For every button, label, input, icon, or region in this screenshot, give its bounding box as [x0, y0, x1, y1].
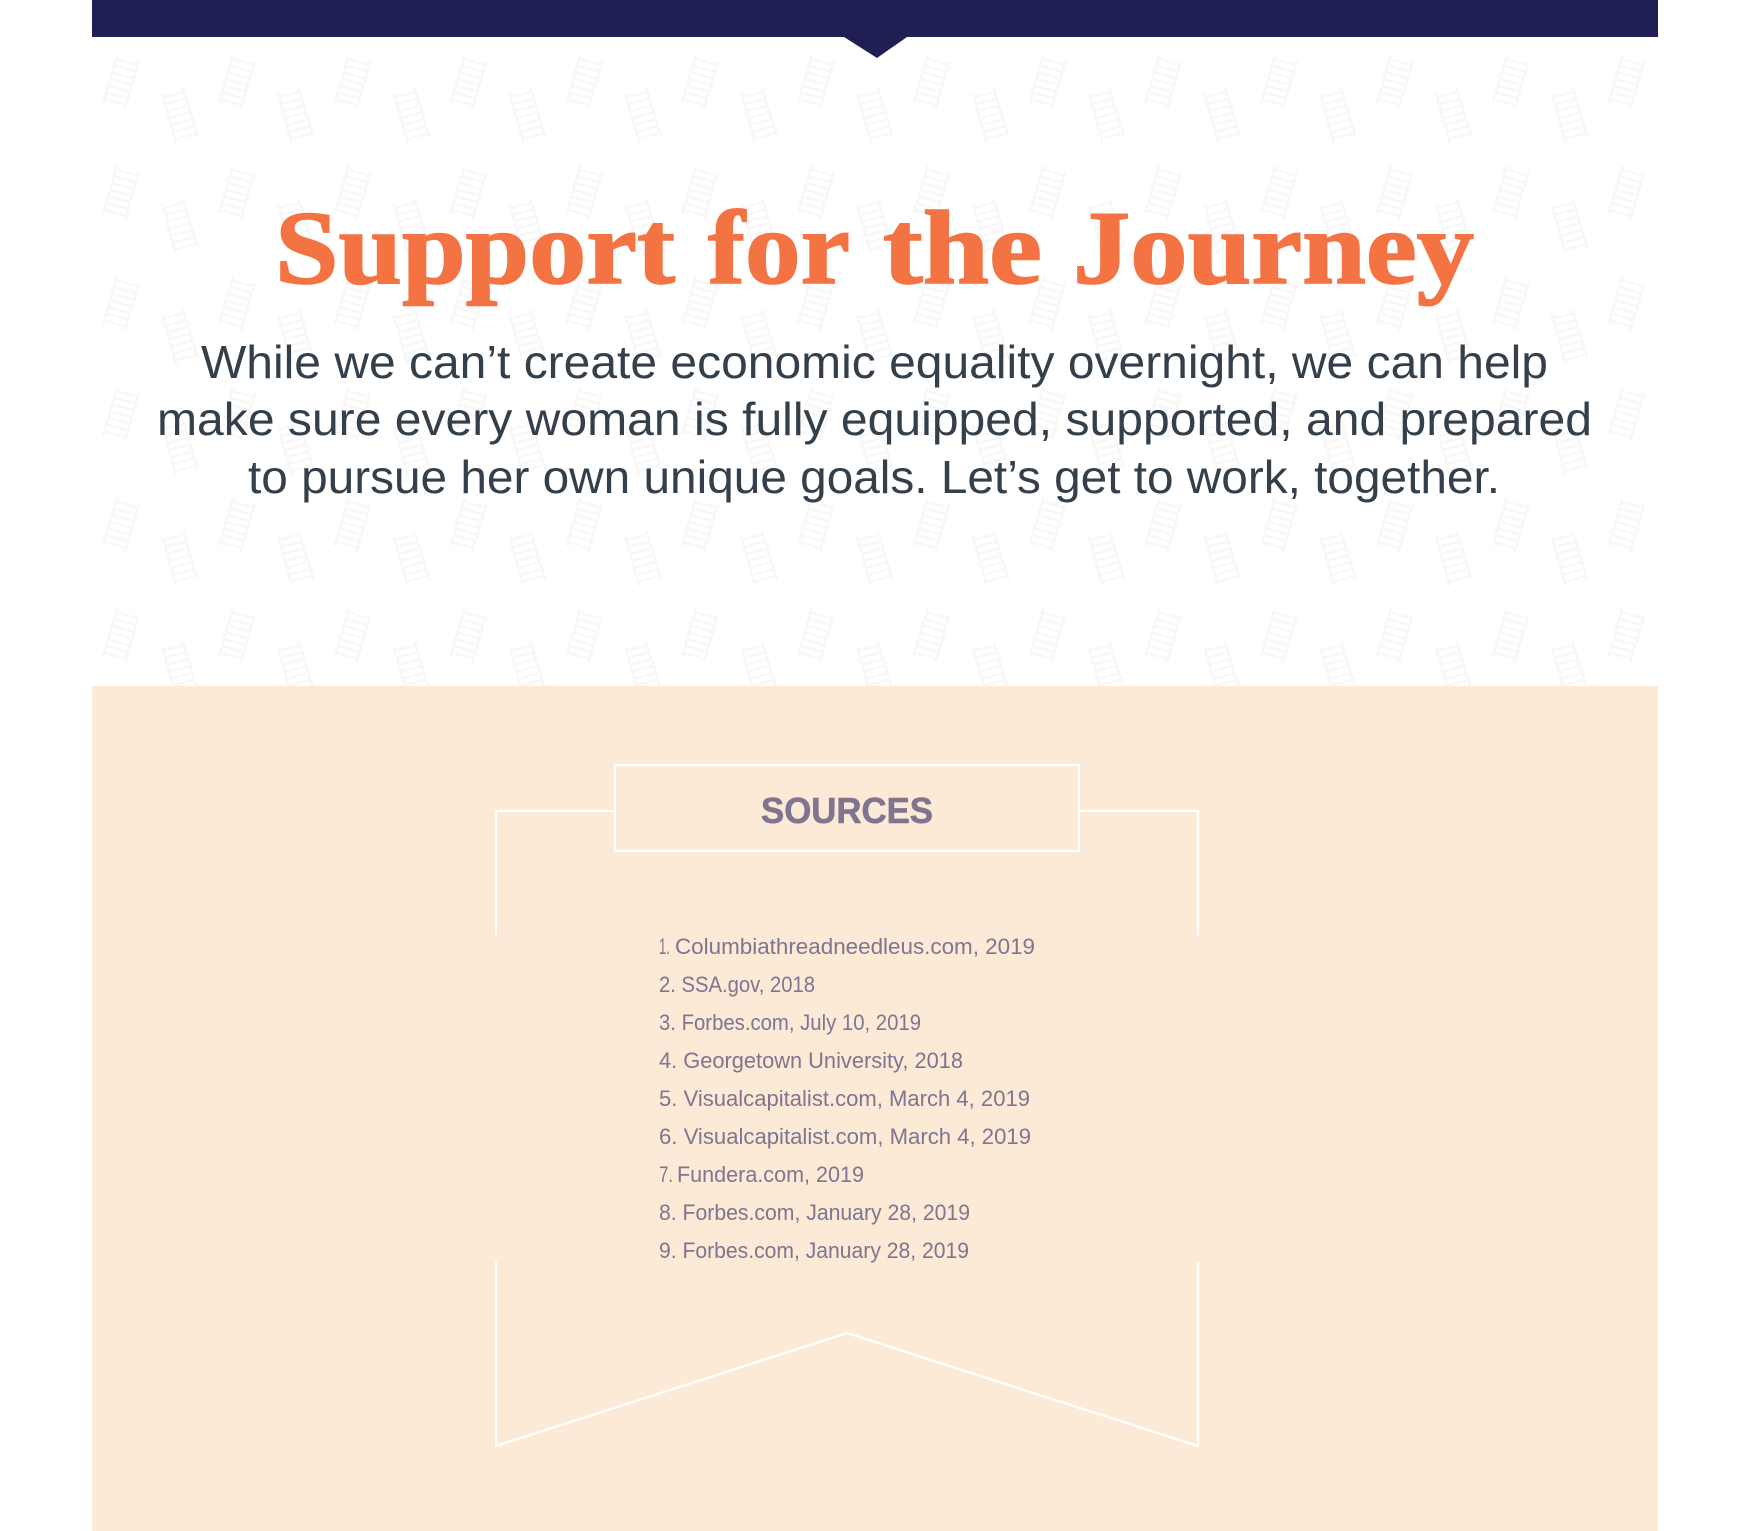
- title: the: [883, 189, 1042, 306]
- sources list: 4. Georgetown University, 2018: [659, 1048, 963, 1073]
- sources heading box: [615, 765, 1079, 851]
- intro paragraph: make sure every woman is fully equipped, supported, and prepared: [157, 393, 1592, 445]
- sources list: 1.: [659, 934, 670, 959]
- panel: sources: [92, 686, 1658, 1531]
- sources list: 9. Forbes.com, January 28, 2019: [659, 1238, 969, 1263]
- title: for: [708, 189, 850, 306]
- sources list: Fundera.com, 2019: [677, 1162, 864, 1187]
- ribbon outline: [496, 811, 1198, 1446]
- sources list: 8. Forbes.com, January 28, 2019: [659, 1200, 970, 1225]
- title: Support: [275, 189, 675, 306]
- sources list: 7.: [659, 1162, 673, 1187]
- sources list: 6. Visualcapitalist.com, March 4, 2019: [659, 1124, 1031, 1149]
- title: [275, 189, 1474, 306]
- sources heading box: SOURCES: [761, 790, 933, 831]
- title: Journey: [1073, 189, 1474, 306]
- sources list: 5. Visualcapitalist.com, March 4, 2019: [659, 1086, 1030, 1111]
- sources list: Columbiathreadneedleus.com, 2019: [675, 934, 1035, 959]
- intro paragraph: to pursue her own unique goals. Let’s get to work, together.: [248, 451, 1500, 503]
- intro paragraph: While we can’t create economic equality overnight, we can help: [201, 336, 1548, 388]
- sources list: [659, 934, 1035, 1263]
- sources list: 3. Forbes.com, July 10, 2019: [659, 1010, 921, 1035]
- top banner with notch: [92, 0, 1658, 58]
- intro paragraph: [157, 336, 1592, 503]
- sources list: 2. SSA.gov, 2018: [659, 972, 815, 997]
